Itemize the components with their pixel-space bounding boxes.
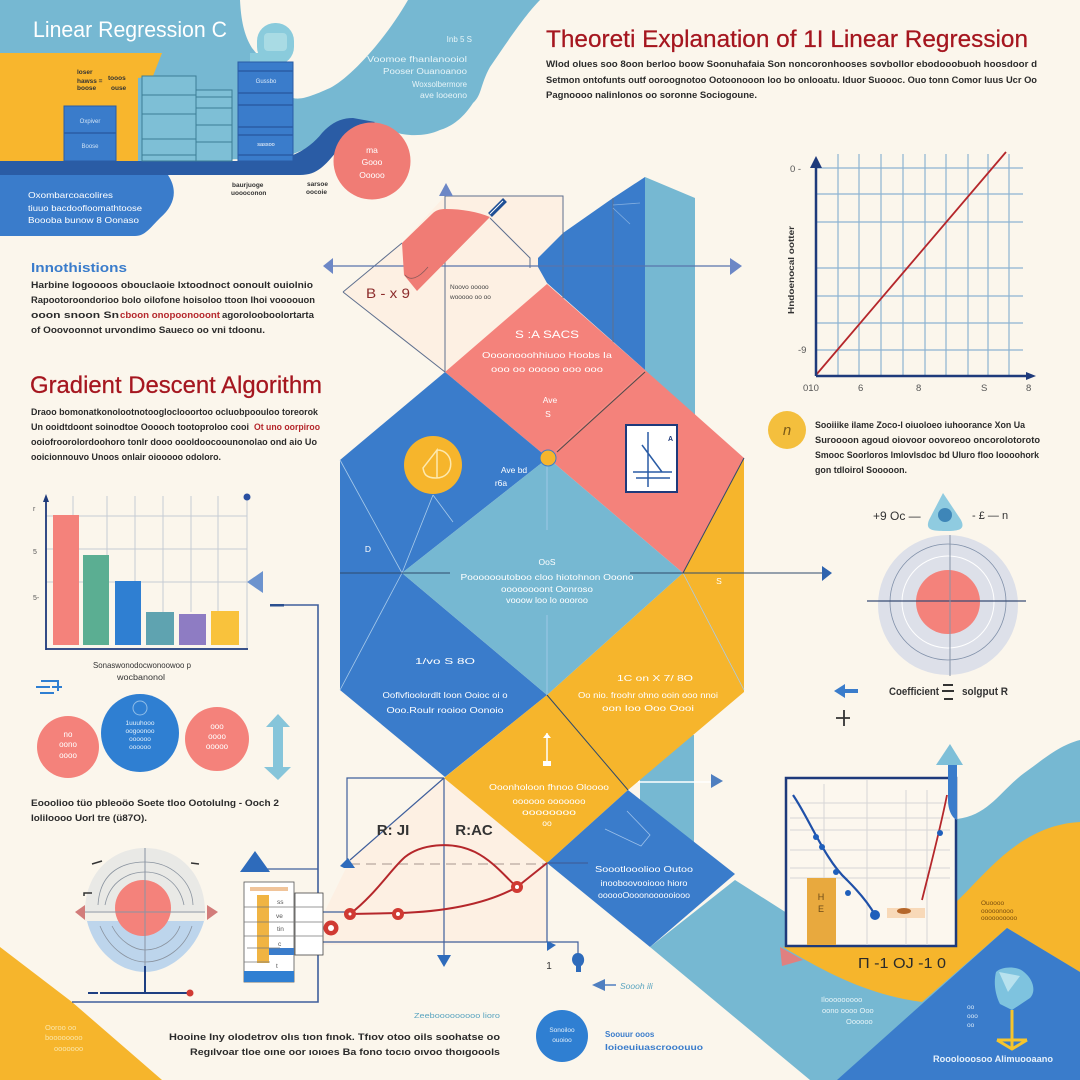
- blue box text: Oxombarcoacolires: [28, 190, 113, 200]
- blue circle badge: Sonoiloo: [549, 1027, 575, 1034]
- panel: top-left header scene: [0, 0, 540, 236]
- panel: right yellow: S: [716, 576, 722, 586]
- small cabinet: [64, 106, 116, 161]
- diamond: top red: [445, 284, 645, 458]
- circles row: ooooo: [206, 742, 229, 751]
- circles row: ooo: [210, 722, 224, 731]
- diamond: lower right blue: [547, 790, 735, 947]
- salmon circle: [334, 122, 410, 200]
- diamond: lower right blue: Soootlooolioo Outoo: [595, 864, 693, 874]
- red curve: R: JI: [377, 822, 409, 839]
- panel: lower peach: [323, 778, 547, 945]
- center dot: [540, 450, 556, 466]
- heading and text: left notes: agorolooboolortarta: [222, 310, 315, 321]
- text block: intro: Pagnoooo nalinlonos oo soronne Sociogoune.: [546, 90, 757, 101]
- panel: bottom right waves: oono oooo Ooo: [822, 1006, 874, 1015]
- panel: table widget: ve: [276, 913, 283, 920]
- heading and text: left notes: Harbine Iogoooos obouclaoie Ixtoodnoct oonoult ouiolnio: [31, 280, 313, 291]
- top diagram lines: [333, 190, 730, 372]
- panel: teal column: [645, 177, 695, 420]
- panel: bottom right waves: Oooooo: [846, 1017, 873, 1026]
- chart: gradient curve: E: [818, 904, 824, 914]
- panel: bottom right waves: oo: [967, 1004, 975, 1011]
- panel: circular diagram right: solgput R: [962, 686, 1008, 698]
- red curve: R:AC: [455, 822, 493, 839]
- diamond: center teal: oooooooont Oonroso: [501, 584, 593, 594]
- text block: bottom: [169, 1032, 500, 1058]
- panel: right yellow: [547, 458, 744, 790]
- panel: lower left blue: Ooo.Roulr rooioo Oonoio: [386, 705, 504, 715]
- panel: table widget: tin: [277, 926, 284, 933]
- small teal heading: Zeebooooooooo lioro: [414, 1011, 500, 1020]
- diamond: top red: Ave: [543, 395, 558, 405]
- diamond: left blue: D: [365, 544, 371, 554]
- panel: bottom right waves: Ouoooo: [981, 900, 1005, 907]
- heading and text: left notes: ooon snoon Sn: [31, 310, 119, 321]
- line chart: -9: [798, 345, 806, 356]
- bar chart: [33, 494, 263, 682]
- arrow: up: [936, 744, 963, 820]
- diamond: right salmon: [548, 370, 744, 573]
- labels on yellow: [77, 69, 127, 92]
- diamond: center teal: vooow loo lo oooroo: [506, 595, 588, 605]
- panel: right yellow: oon Ioo Ooo Oooi: [602, 703, 694, 713]
- tall cabinet: sassoo: [257, 142, 275, 148]
- small band labels: sarsoe: [307, 181, 328, 188]
- line chart: 0 -: [790, 164, 801, 175]
- wave text: Pooser Ouanoanoo: [383, 67, 468, 76]
- icon: teal dome: [250, 23, 294, 65]
- arrow: left label: Soooh ili: [620, 981, 654, 991]
- icon: teal triangle: [928, 493, 963, 531]
- panel: lower left blue: 1/vo S 8O: [415, 656, 476, 666]
- title: Linear Regression C: [33, 17, 227, 42]
- arrow: teal double: [264, 714, 291, 780]
- panel: bottom right waves: oo: [967, 1022, 975, 1029]
- panel: lower teal column: [640, 735, 694, 845]
- circles row: oogoonoo: [126, 728, 155, 735]
- diamond: top red: S :A SACS: [515, 329, 579, 341]
- small band labels: baurjuoge: [232, 182, 264, 189]
- arrows: horizontal: [323, 183, 742, 275]
- blue text right of badge: [605, 1030, 703, 1052]
- text block: intro: Wlod olues soo 8oon berloo boow Soonuhafaia Son noncoronhooses sovbollor ebodooobuoh hoosdoor d: [546, 59, 1037, 70]
- plus sign: [836, 710, 850, 726]
- small note: wooooo oo oo: [449, 294, 491, 301]
- diamond: left blue: Ave bd: [501, 465, 527, 475]
- circles row: oooo: [208, 732, 226, 741]
- line chart: S: [981, 383, 987, 394]
- panel: bottom right waves: ooo: [967, 1013, 978, 1020]
- formula: B - x 9: [366, 285, 410, 301]
- panel: circular diagram right: Coefficient: [889, 686, 939, 698]
- blue circle badge: ouoioo: [552, 1037, 572, 1044]
- salmon circle: ma: [366, 145, 378, 155]
- arrow: left label: [592, 979, 654, 991]
- labels on yellow: loser: [77, 69, 93, 76]
- panel: bottom right waves: ooooonooo: [981, 908, 1014, 915]
- circles row: oooooo: [129, 744, 151, 751]
- panel: yellow corner: ooooooo: [54, 1044, 83, 1053]
- chart: gradient curve: [780, 744, 963, 972]
- panel: circular diagram right: [867, 493, 1026, 699]
- salmon circle: Ooooo: [359, 170, 385, 180]
- arrows: connector ends: [240, 851, 584, 972]
- small band labels: oocoie: [306, 189, 327, 196]
- heading and text: left notes: of Ooovoonnot urvondimo Saueco oo vni tdoonu.: [31, 325, 265, 336]
- blue circle badge: [536, 1010, 588, 1062]
- icon: gem: [995, 968, 1033, 1049]
- small cabinet: Boose: [81, 144, 99, 150]
- callout: yellow circle note: Sooiiike ilame Zoco-l oiuoloeo iuhoorance Xon Ua: [815, 420, 1026, 431]
- callout: yellow circle note: [768, 411, 1040, 476]
- teal cabinets: [142, 76, 232, 161]
- icon: small equals mark: [36, 681, 62, 693]
- bar chart: 5: [33, 549, 37, 556]
- diamond: left blue: r6a: [495, 478, 507, 488]
- panel: table widget: t: [276, 963, 278, 970]
- arrow: right from center: [822, 566, 832, 581]
- line chart: 010: [803, 383, 819, 394]
- circles row: oooo: [59, 751, 77, 760]
- line chart: 8: [1026, 383, 1031, 394]
- blue text right of badge: Ioioeuiuascrooouuo: [605, 1043, 703, 1052]
- callout: yellow circle note: Suroooon agoud oiovoor oovoreoo oncorolotoroto: [815, 435, 1040, 446]
- wave text: Inb 5 S: [447, 35, 472, 44]
- text block: bottom: Hooine Iny olodetrov olıs tıon fınok. Tfıov otoo oils soohatse oo: [169, 1032, 500, 1043]
- circles row: 1uuuhooo: [126, 720, 155, 727]
- diamond: left blue: S: [352, 576, 358, 586]
- tall cabinet: [238, 62, 293, 161]
- panel: table widget: ss: [277, 899, 284, 906]
- wave text: Woxsolbermore: [412, 80, 468, 89]
- heading and text: left notes: Innothistions: [31, 260, 127, 275]
- text block: below circles: Ioliloooo Uorl tre (ü87O).: [31, 813, 147, 824]
- icon: yellow gauge: [404, 436, 462, 494]
- small cabinet: Oxpiver: [80, 119, 100, 125]
- arrow: right lower white: [638, 774, 723, 788]
- panel: yellow corner: Ooroo oo: [45, 1023, 76, 1032]
- text block: intro: Setmon ontofunts outf ooroognotoo Ootoonooon loo bo onlooatu. Iduor Suoooc. Ouo tonn Comor Iuus Ucr Oo: [546, 75, 1037, 86]
- labels on yellow: hawss =: [77, 78, 103, 85]
- panel: table widget: c: [278, 941, 282, 948]
- heading and text: left notes: cboon onopoonooont: [120, 310, 221, 321]
- panel: circular diagram right: +9 Oc —: [873, 509, 921, 523]
- text block: gradient descent: ooicionnouvo Unoos onlair oiooooo odoloro.: [31, 452, 221, 463]
- text block: below circles: [31, 798, 279, 824]
- panel: top blue shape: [538, 177, 645, 370]
- wave text: ave looeono: [420, 91, 468, 100]
- diamond: center teal: Pooooooutoboo cloo hiotohnon Ooono: [460, 572, 634, 582]
- diamond: center teal: [402, 458, 683, 695]
- diamond: top red: ooo oo ooooo ooo ooo: [491, 364, 603, 374]
- blue box text: tiuuo bacdoofloomathtoose: [28, 203, 142, 213]
- tall cabinet: Gussbo: [256, 79, 277, 85]
- callout: yellow circle note: Smooc Soorloros lmlovlsdoc bd Uluro floo Ioooohork: [815, 450, 1040, 461]
- blue text right of badge: Soouur ooos: [605, 1030, 655, 1039]
- circles row: oooooo: [129, 736, 151, 743]
- heading and text: left notes: [31, 260, 315, 336]
- small note: [449, 284, 491, 301]
- panel: yellow corner: [0, 947, 162, 1080]
- bar chart: 5-: [33, 595, 40, 602]
- wave text: Voomoe fhanlanooiol: [367, 55, 467, 64]
- callout: yellow circle note: n: [783, 422, 791, 439]
- blue box text: Boooba bunow 8 Oonaso: [28, 215, 139, 225]
- panel: bottom right waves: Ilooooooooo: [821, 995, 862, 1004]
- text block: gradient descent: [31, 407, 320, 463]
- line chart: 6: [858, 383, 863, 394]
- text block: gradient descent: Un ooidtdoont soinodtoe Ooooch tootoproloo cooi: [31, 422, 249, 433]
- bar chart: wocbanonol: [116, 673, 165, 682]
- central diamonds: [340, 284, 822, 947]
- red curve: [324, 822, 547, 936]
- panel: table widget: [244, 882, 323, 982]
- small band labels: uoooconon: [231, 190, 266, 197]
- panel: lower left blue: [340, 573, 547, 777]
- panel: right yellow: Oo nio. froohr ohno ooin ooo nnoi: [578, 690, 718, 700]
- line chart: Hndoenocal ootter: [786, 225, 796, 314]
- connector: [72, 604, 588, 1002]
- diamond: center teal: OoS: [538, 557, 556, 567]
- center lines: [340, 458, 822, 790]
- diamond: top red: Oooonooohhiuoo Hoobs Ia: [482, 350, 612, 360]
- diamond: lower yellow: Ooonholoon fhnoo Oloooo: [489, 782, 609, 792]
- diamond: left blue: [340, 372, 548, 586]
- text block: bottom: Regılvoar tloe oıne oor ıoıoes Ba fono tocıo oıvoo thoıgoools: [190, 1047, 500, 1058]
- small note: Noovo ooooo: [450, 284, 489, 291]
- circles row: no: [64, 730, 73, 739]
- panel: bottom right waves: oooooooooo: [981, 915, 1018, 922]
- bar chart: r: [33, 506, 36, 513]
- wave text: [367, 35, 472, 100]
- circles row: [37, 694, 249, 778]
- line chart: 8: [916, 383, 921, 394]
- callout: yellow circle note: gon tdloirol Sooooon.: [815, 465, 907, 476]
- blue box text: [28, 190, 142, 225]
- diamond: top red: S: [545, 409, 551, 419]
- diamond: lower right blue: inooboovooiooo hioro: [600, 878, 688, 888]
- panel: lower-left circular diagram: [75, 848, 218, 996]
- panel: bottom right waves: [650, 740, 1080, 1080]
- panel: bottom right waves: Rooolooosoo Alimuooaano: [933, 1054, 1054, 1064]
- chart: gradient curve: Π -1 OJ -1 0: [858, 955, 946, 972]
- line chart: [786, 152, 1036, 394]
- bar chart: Sonaswonodocwonoowoo p: [93, 660, 191, 670]
- chart: gradient curve: H: [818, 892, 824, 902]
- labels on yellow: boose: [77, 85, 97, 92]
- heading and text: left notes: Rapootoroondorioo bolo oilofone hoisoloo ttoon Ihoi voooouon: [31, 295, 315, 306]
- text block: gradient descent: Draoo bomonatkonolootnotoogloclooortoo ocluobpoouloo toreorok: [31, 407, 319, 418]
- heading: top right: Theoreti Explanation of 1I Linear Regression: [546, 26, 1028, 53]
- diamond: right salmon: A: [668, 436, 673, 443]
- text: small t: 1: [546, 961, 552, 972]
- diamond: lower yellow: oooooo ooooooo: [512, 796, 586, 806]
- diamond: lower yellow: oooooooo: [522, 807, 576, 817]
- diamond: lower yellow: [444, 695, 628, 863]
- red curved shape: [402, 200, 505, 291]
- labels on yellow: tooos: [108, 75, 126, 82]
- text block: intro: [546, 59, 1037, 101]
- diamond: lower right blue: oooooOooonoooooiooo: [598, 890, 690, 900]
- arrow: blue left: [834, 684, 858, 698]
- text block: gradient descent: Ot uno oorpiroo: [254, 422, 320, 433]
- labels on yellow: ouse: [111, 85, 127, 92]
- salmon circle: Gooo: [362, 157, 383, 167]
- panel: yellow corner: boooooooo: [45, 1033, 83, 1042]
- small band labels: [231, 181, 328, 197]
- diamond: lower yellow: oo: [542, 818, 552, 828]
- circles row: oono: [59, 740, 77, 749]
- heading: gradient descent: Gradient Descent Algorithm: [30, 372, 322, 399]
- panel: peach top: [343, 196, 563, 372]
- panel: circular diagram right: - £ — n: [972, 510, 1008, 522]
- panel: right yellow: 1C on X 7/ 8O: [617, 673, 694, 683]
- panel: lower left blue: Ooflvfioolordlt Ioon Ooioc oi o: [382, 690, 508, 700]
- text block: below circles: Eooolioo tüo pbleoöo Soete tloo Ootolulng - Ooch 2: [31, 798, 279, 809]
- text block: gradient descent: ooiofroorolordoohoro tonlr dooo oooldoocoounonolao ond aio Uo: [31, 437, 317, 448]
